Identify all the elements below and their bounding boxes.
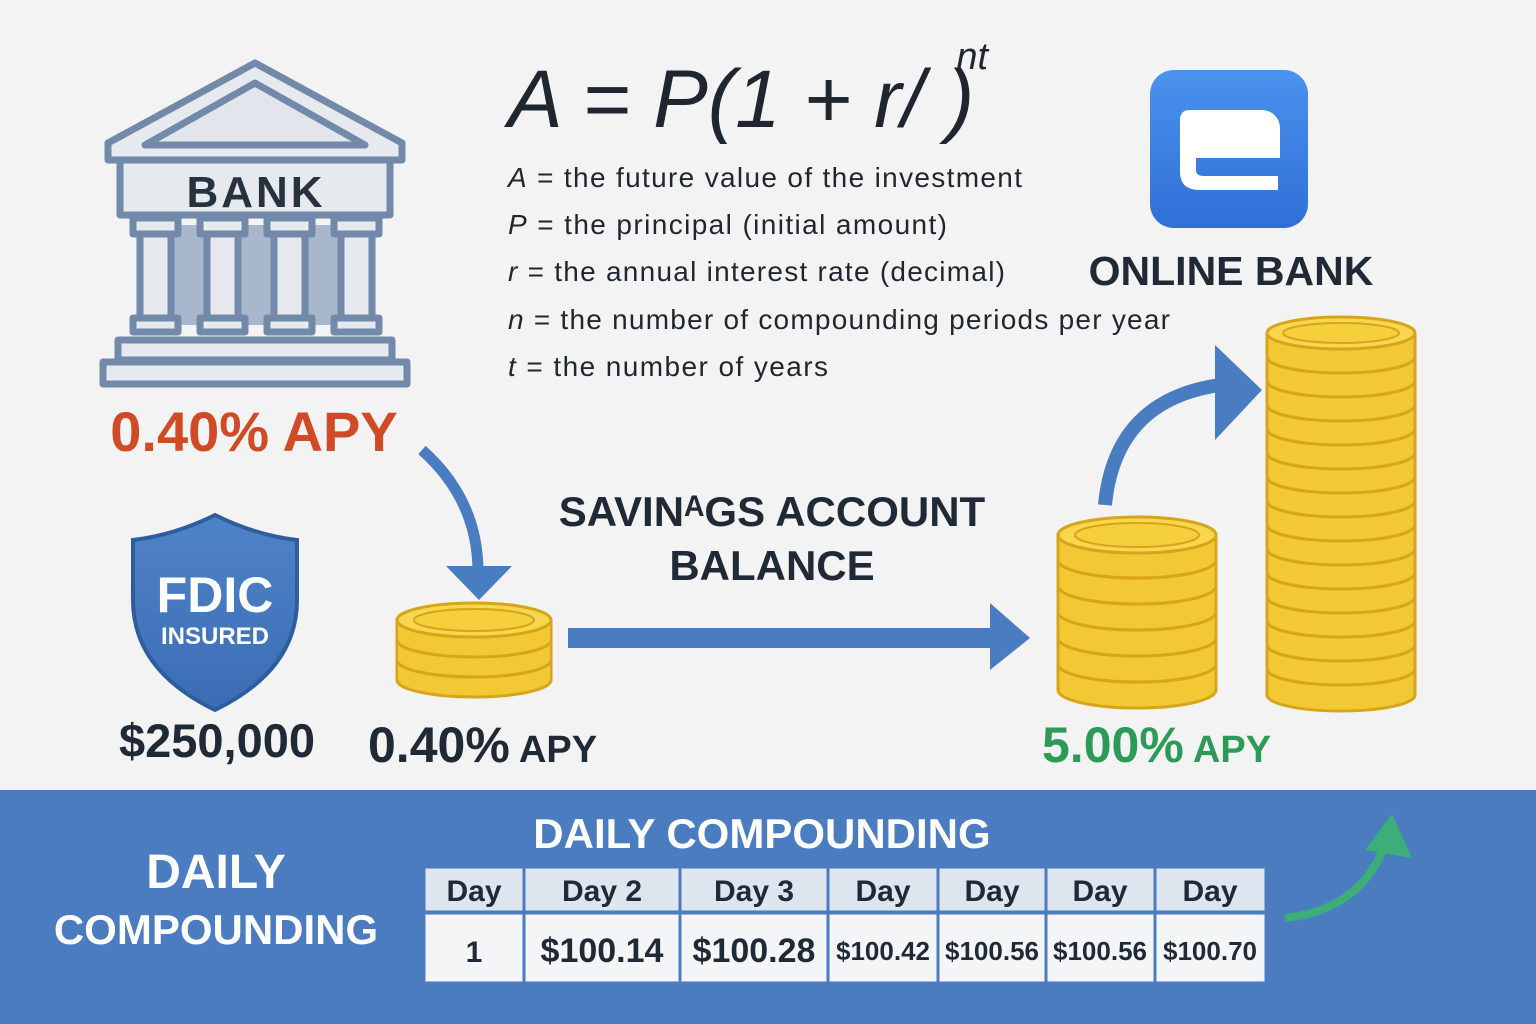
bank label: BANK	[186, 168, 326, 217]
formula definitions	[506, 162, 1170, 382]
arrow: bank down to coins	[422, 450, 512, 600]
table heading: DAILY COMPOUNDING	[533, 810, 991, 857]
coin stack middle	[1058, 517, 1216, 708]
table: $100.42	[836, 936, 930, 966]
table: $100.56	[1053, 936, 1147, 966]
formula: nt	[956, 36, 989, 78]
table: 1	[466, 936, 482, 969]
band left heading: DAILY	[146, 846, 286, 899]
bank rate: 0.40% APY	[110, 400, 398, 463]
table: Day	[1182, 875, 1238, 908]
table: $100.70	[1163, 936, 1257, 966]
table: Day	[1072, 875, 1128, 908]
icon: online bank app	[1150, 70, 1308, 228]
table	[424, 867, 1266, 983]
arrow: horizontal growth	[568, 603, 1030, 670]
arrow: curved up to tall stack	[1105, 345, 1262, 505]
icon: FDIC shield	[133, 515, 297, 710]
table: $100.14	[541, 932, 664, 970]
formula definitions: P = the principal (initial amount)	[508, 209, 947, 240]
formula definitions: n = the number of compounding periods per year	[508, 304, 1170, 335]
formula definitions: A = the future value of the investment	[506, 162, 1022, 193]
table: Day	[855, 875, 911, 908]
table: Day 2	[562, 875, 642, 908]
online rate: 5.00% APY	[1042, 717, 1271, 773]
arrow: green upward	[1285, 814, 1412, 918]
coin stack tall	[1267, 317, 1415, 711]
icon: FDIC shield: FDIC	[157, 567, 273, 623]
table: Day	[964, 875, 1020, 908]
icon: FDIC shield: INSURED	[161, 623, 269, 650]
table: Day 3	[714, 875, 794, 908]
icon: bank building	[103, 63, 407, 384]
bottom band	[0, 790, 1536, 1024]
table: Day	[446, 875, 502, 908]
section heading: savings account balance: SAVINᴬGS ACCOUNT	[559, 488, 986, 535]
small stack rate: 0.40% APY	[368, 717, 597, 773]
text: BALANCE	[669, 542, 875, 589]
formula definitions: t = the number of years	[508, 351, 828, 382]
formula: A = P(1 + r/ )	[508, 54, 974, 145]
FDIC amount: $250,000	[119, 714, 315, 767]
formula definitions: r = the annual interest rate (decimal)	[508, 256, 1005, 287]
bottom band: COMPOUNDING	[54, 906, 378, 953]
table: $100.56	[945, 936, 1039, 966]
online bank label: ONLINE BANK	[1089, 248, 1374, 294]
table: $100.28	[693, 932, 815, 970]
coin stack small	[397, 603, 551, 697]
